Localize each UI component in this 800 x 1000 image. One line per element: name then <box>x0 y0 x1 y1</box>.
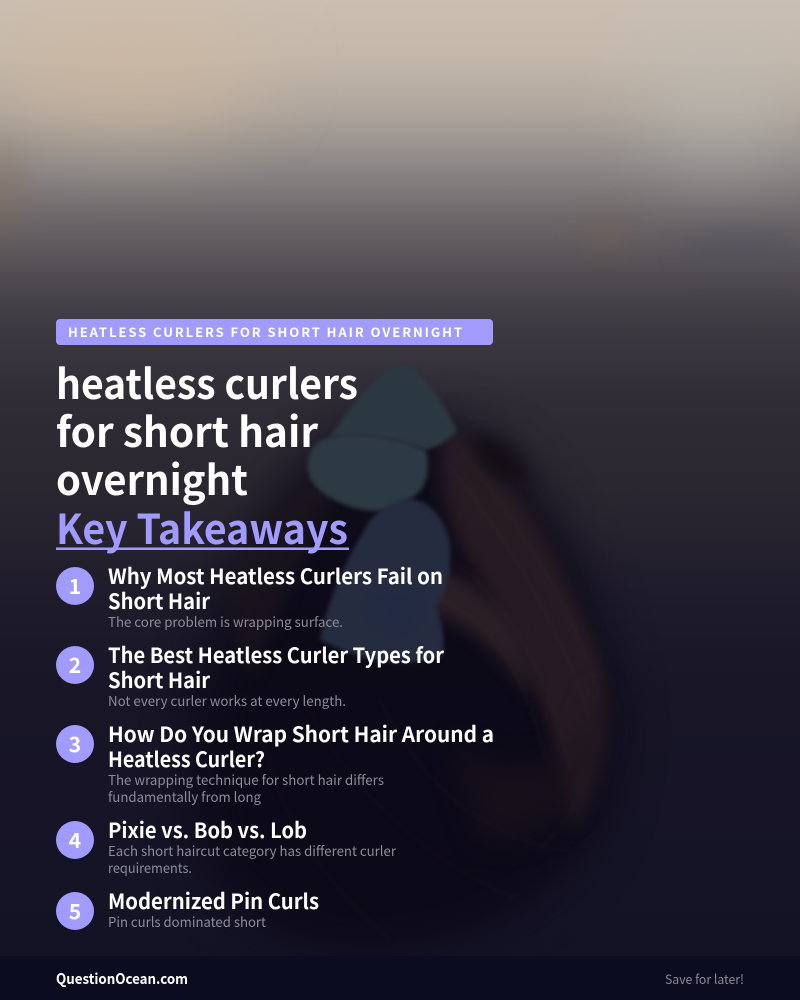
title: heatless curlers <box>56 351 358 411</box>
takeaway 1 heading <box>108 561 443 616</box>
curlers <box>330 363 457 450</box>
takeaway 2 heading: Short Hair <box>108 665 211 695</box>
number badge 4: 4 <box>69 825 81 855</box>
takeaway 3 description <box>108 769 384 806</box>
takeaway 5 description: Pin curls dominated short <box>108 911 266 931</box>
footer save note: Save for later! <box>665 969 744 988</box>
takeaway 3 description: fundamentally from long <box>108 786 261 806</box>
number badge 4 <box>56 821 94 859</box>
subtitle: Key Takeaways: Key Takeaways <box>56 496 348 556</box>
title: overnight <box>56 447 248 507</box>
footer bar <box>0 956 800 1000</box>
takeaway 3 <box>56 719 494 806</box>
takeaway 2 heading: The Best Heatless Curler Types for <box>108 640 445 670</box>
category tag <box>56 319 493 345</box>
number badge 5 <box>56 892 94 930</box>
takeaway 1 heading: Short Hair <box>108 586 211 616</box>
category tag: HEATLESS CURLERS FOR SHORT HAIR OVERNIGHT <box>68 322 462 341</box>
number badge 2 <box>56 646 94 684</box>
takeaway 5 heading: Modernized Pin Curls <box>108 886 319 916</box>
takeaway 3 heading: How Do You Wrap Short Hair Around a <box>108 719 494 749</box>
takeaway 4 description: requirements. <box>108 857 192 877</box>
takeaway 5 <box>56 886 319 931</box>
takeaway 3 heading <box>108 719 494 774</box>
title: for short hair <box>56 399 318 459</box>
takeaway 2 description: Not every curler works at every length. <box>108 690 346 710</box>
number badge 3: 3 <box>69 729 81 759</box>
number badge 2: 2 <box>69 650 81 680</box>
takeaway 4 <box>56 815 397 877</box>
number badge 1: 1 <box>69 571 81 601</box>
title <box>56 351 358 507</box>
takeaway 1 heading: Why Most Heatless Curlers Fail on <box>108 561 443 591</box>
number badge 1 <box>56 567 94 605</box>
takeaway 2 <box>56 640 445 710</box>
takeaway 2 heading <box>108 640 445 695</box>
hair mass <box>189 416 615 950</box>
takeaway 4 description <box>108 840 397 877</box>
takeaway 4 heading: Pixie vs. Bob vs. Lob <box>108 815 307 845</box>
takeaway 3 description: The wrapping technique for short hair differs <box>108 769 384 789</box>
number badge 3 <box>56 725 94 763</box>
takeaway 4 description: Each short haircut category has different curler <box>108 840 397 860</box>
takeaway 3 heading: Heatless Curler? <box>108 744 265 774</box>
takeaway 1 <box>56 561 443 631</box>
footer brand: QuestionOcean.com <box>56 968 188 989</box>
takeaway 1 description: The core problem is wrapping surface. <box>108 611 343 631</box>
number badge 5: 5 <box>69 896 81 926</box>
